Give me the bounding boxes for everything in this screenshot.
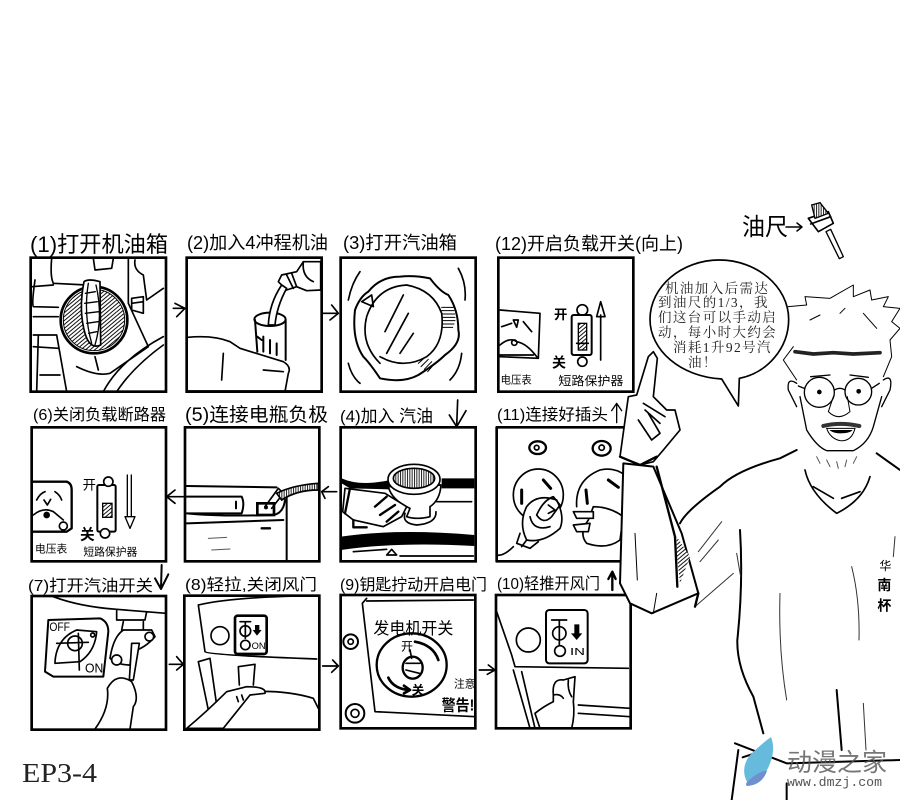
panel 6: close load breaker: 关: [80, 526, 95, 543]
arrow: dipstick label: [786, 223, 802, 231]
heading: step 7: (7)打开汽油开关: [28, 577, 153, 595]
watermark: 动漫之家: [787, 749, 887, 777]
panel 12: open load switch: 开: [554, 307, 567, 322]
heading: step 9: (9)钥匙拧动开启电门: [340, 576, 487, 594]
panel 11: connect plugs: [497, 427, 625, 561]
hair: [783, 285, 900, 380]
panel 9: turn key to start: 发电机开关: [373, 619, 453, 638]
bubble text: 动，每小时大约会: [658, 324, 777, 341]
watermark: [744, 737, 887, 790]
arrow: down beside step 7: [155, 565, 168, 589]
panel 7: open fuel switch: OFF: [49, 620, 70, 634]
panel 8: pull choke closed: [184, 596, 319, 730]
arrow: step 7 to 8: [169, 657, 183, 670]
panel 12: open load switch: 电压表: [501, 374, 532, 387]
shirt slogan: 华: [879, 559, 891, 573]
ears: [788, 378, 891, 407]
arrow: step 9 to 10: [479, 665, 495, 674]
panel 2: add four-stroke oil: [187, 258, 322, 392]
panel 6: close load breaker: 短路保护器: [83, 545, 138, 558]
heading: step 2: (2)加入4冲程机油: [187, 233, 328, 253]
arrow: down to step 4: [449, 400, 466, 427]
collar: [805, 470, 870, 513]
panel 9: turn key to start: 关: [412, 682, 425, 697]
bubble text: 消耗1升92号汽: [673, 339, 772, 355]
panel 5: connect battery negative: [185, 427, 319, 561]
head: [793, 348, 880, 450]
panel 4: add gasoline: [341, 427, 476, 561]
arrow: step 2 to 3: [322, 305, 338, 320]
panel 1: open oil tank: [31, 258, 166, 392]
panel 12: open load switch: 关: [552, 354, 566, 370]
shirt slogan: 杯: [877, 598, 891, 614]
panel 9: turn key to start: [341, 595, 475, 728]
bubble text: 们这台可以手动启: [658, 309, 777, 325]
arrow: step 4 to 5: [322, 487, 337, 498]
torso outline: [680, 450, 900, 800]
heading: step 6: (6)关闭负载断路器: [33, 406, 166, 424]
neck hatch: [817, 457, 857, 468]
panel 7: open fuel switch: [32, 596, 166, 730]
heading: step 3: (3)打开汽油箱: [343, 233, 457, 253]
panel 9: turn key to start: 开: [401, 640, 413, 654]
bubble text: 油！: [688, 354, 718, 370]
episode label: EP3-4: [22, 758, 98, 788]
panel 9: turn key to start: 注意: [454, 678, 475, 691]
bubble text: 到油尺的1/3，我: [658, 294, 769, 311]
panel 7: open fuel switch: ON: [85, 662, 103, 676]
panel 12: open load switch: 短路保护器: [558, 373, 623, 388]
panel 6: close load breaker: [32, 427, 166, 561]
speech bubble: [650, 260, 789, 406]
shirt folds: [695, 522, 895, 750]
character: presenter with raised finger: [620, 285, 900, 800]
panel 10: gently open choke: [496, 595, 631, 728]
shirt slogan: 南: [877, 577, 891, 593]
icon: dipstick: [808, 203, 843, 259]
watermark: www.dmzj.com: [787, 775, 882, 790]
arrow: up beside step 11: [612, 403, 622, 423]
arrow: step 8 to 9: [323, 660, 338, 672]
panel 8: pull choke closed: ON: [252, 641, 266, 651]
raised arm and fist: [620, 463, 698, 613]
heading: step 11: (11)连接好插头: [497, 406, 608, 424]
panel 9: turn key to start: 警告!: [442, 696, 474, 714]
heading: step 10: (10)轻推开风门: [497, 575, 600, 593]
arrow: up beside step 10: [608, 572, 616, 590]
arrow: step 5 to 6: [167, 490, 183, 503]
icon: blue droplet: [744, 737, 773, 786]
arrow: step 1 to 2: [173, 303, 185, 317]
heading: step 8: (8)轻拉,关闭风门: [185, 576, 317, 594]
heading: step 12: (12)开启负载开关(向上): [495, 234, 683, 254]
heading: step 1: (1)打开机油箱: [30, 232, 168, 257]
moustache: [823, 424, 859, 426]
glasses: [804, 377, 834, 407]
panel 3: open fuel tank: [341, 258, 476, 392]
bubble text: 机油加入后需达: [665, 280, 769, 296]
nose: [828, 397, 850, 417]
mouth: [827, 428, 855, 441]
label: dipstick: 油尺: [742, 214, 788, 241]
panel 6: close load breaker: 电压表: [35, 542, 68, 555]
panel 10: gently open choke: IN: [570, 647, 585, 658]
heading: step 5: (5)连接电瓶负极: [185, 404, 328, 426]
panel 12: open load switch: [498, 258, 633, 392]
panel 6: close load breaker: 开: [83, 477, 96, 492]
shirt slogan: [877, 559, 891, 614]
heading: step 4: (4)加入 汽油: [340, 407, 433, 426]
